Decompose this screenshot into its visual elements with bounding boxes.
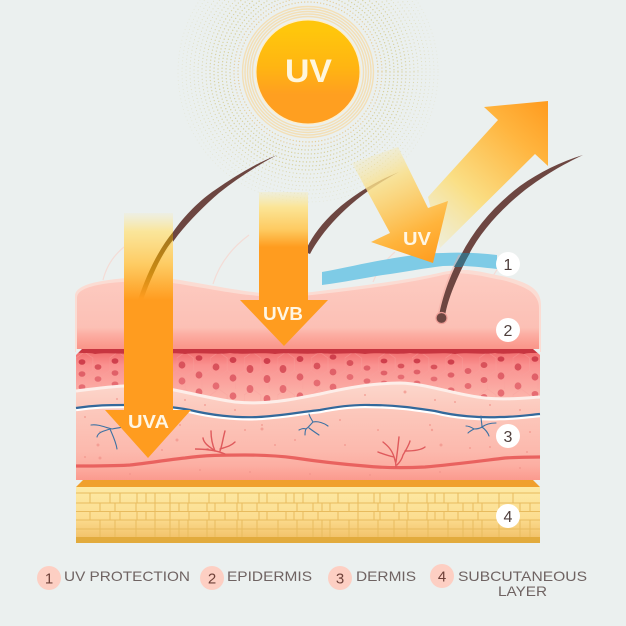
subcutaneous layer xyxy=(76,480,540,543)
UVB arrow: UVB xyxy=(263,304,303,324)
UVB arrow xyxy=(240,192,328,346)
layer badge 4 xyxy=(496,504,520,528)
UV protection band xyxy=(322,253,497,285)
layer badge 2 xyxy=(496,318,520,342)
UVA arrow xyxy=(105,213,191,458)
legend item 2: 2 xyxy=(208,570,216,588)
hair with follicle xyxy=(436,155,583,324)
incoming UV arrow: UV xyxy=(403,229,431,249)
layer badge 1: 1 xyxy=(504,257,513,274)
layer badge 3 xyxy=(496,424,520,448)
red capillaries xyxy=(195,431,425,467)
hair left xyxy=(138,155,277,300)
faint hairs xyxy=(103,235,504,284)
legend item 4: 4 xyxy=(438,568,446,586)
sun halo dots xyxy=(178,0,438,202)
blue vessel xyxy=(76,406,540,419)
hair middle xyxy=(305,172,399,254)
layer badge 4: 4 xyxy=(504,509,513,526)
legend item 2 xyxy=(200,566,312,590)
legend item 1 xyxy=(37,566,190,590)
layer badge 1 xyxy=(496,252,520,276)
blue capillaries xyxy=(91,414,496,449)
legend item 4: SUBCUTANEOUS xyxy=(458,568,587,584)
legend item 3: DERMIS xyxy=(356,568,416,584)
UVA arrow: UVA xyxy=(128,412,169,432)
reflected UV arrow xyxy=(428,101,548,248)
cell layer xyxy=(76,349,540,402)
dermis layer xyxy=(76,383,540,480)
legend item 3: 3 xyxy=(336,570,344,588)
legend item 4: LAYER xyxy=(498,583,547,599)
incoming UV arrow xyxy=(352,147,448,263)
legend item 4 xyxy=(430,564,587,599)
layer badge 2: 2 xyxy=(504,323,513,340)
legend item 3 xyxy=(328,566,416,590)
epidermis layer xyxy=(75,270,541,352)
red vessel xyxy=(76,455,540,468)
legend item 1: UV PROTECTION xyxy=(64,568,190,584)
legend item 1: 1 xyxy=(45,570,53,588)
layer badge 3: 3 xyxy=(504,429,513,446)
legend item 2: EPIDERMIS xyxy=(227,568,312,584)
dermis specks xyxy=(84,390,531,476)
sun xyxy=(242,6,374,138)
sun: UV xyxy=(285,53,333,89)
